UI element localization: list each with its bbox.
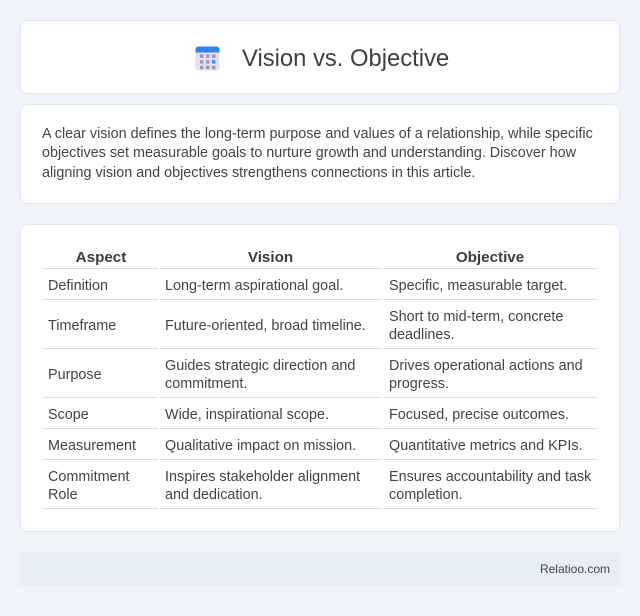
row: Purpose: Purpose bbox=[48, 367, 102, 383]
row: Measurement: Measurement bbox=[48, 438, 136, 454]
row: Scope: Focused, precise outcomes. bbox=[389, 407, 569, 423]
row: Commitment Role: and dedication. bbox=[165, 487, 263, 503]
footer bar bbox=[20, 552, 620, 586]
row: Scope: Scope bbox=[48, 407, 89, 423]
row: Commitment Role: Inspires stakeholder alignment bbox=[165, 469, 360, 485]
intro text bbox=[42, 126, 593, 181]
row: Commitment Role: completion. bbox=[389, 487, 463, 503]
row: Commitment Role: Ensures accountability and task bbox=[389, 469, 591, 485]
row: Commitment Role: Commitment bbox=[48, 469, 130, 485]
row: Scope: Wide, inspirational scope. bbox=[165, 407, 329, 423]
row: Purpose: Drives operational actions and bbox=[389, 358, 583, 374]
column header: Vision: Vision bbox=[248, 249, 293, 266]
row: Definition: Definition bbox=[48, 278, 108, 294]
row: Timeframe: deadlines. bbox=[389, 327, 455, 343]
panel: comparison table bbox=[20, 224, 620, 532]
icon: calendar bbox=[196, 46, 220, 70]
row: Definition: Long-term aspirational goal. bbox=[165, 278, 343, 294]
row: Timeframe bbox=[48, 309, 563, 343]
row: Commitment Role: Role bbox=[48, 487, 78, 503]
column header: Aspect: Aspect bbox=[76, 249, 126, 266]
row: Purpose: commitment. bbox=[165, 376, 247, 392]
title: Vision vs. Objective bbox=[242, 44, 449, 72]
panel: introduction bbox=[20, 104, 620, 204]
row: Definition bbox=[48, 278, 567, 294]
row: Purpose: progress. bbox=[389, 376, 449, 392]
row: Purpose bbox=[48, 358, 583, 392]
panel: title header bbox=[20, 20, 620, 94]
row: Purpose: Guides strategic direction and bbox=[165, 358, 355, 374]
row: Timeframe: Timeframe bbox=[48, 318, 116, 334]
row: Measurement: Qualitative impact on mission. bbox=[165, 438, 356, 454]
intro text: objectives set measurable goals to nurture growth and understanding. Discover how bbox=[42, 145, 576, 161]
footer text: site credit: Relatioo.com bbox=[540, 562, 610, 576]
row: Scope bbox=[48, 407, 569, 423]
row: Definition: Specific, measurable target. bbox=[389, 278, 567, 294]
row: Commitment Role bbox=[48, 469, 592, 503]
row: Timeframe: Short to mid-term, concrete bbox=[389, 309, 563, 325]
row: Timeframe: Future-oriented, broad timeline. bbox=[165, 318, 366, 334]
intro text: A clear vision defines the long-term purpose and values of a relationship, while specific bbox=[42, 126, 593, 142]
row: Measurement bbox=[48, 438, 583, 454]
column header: Objective: Objective bbox=[456, 249, 524, 266]
intro text: aligning vision and objectives strengthens connections in this article. bbox=[42, 165, 475, 181]
row: Measurement: Quantitative metrics and KPIs. bbox=[389, 438, 583, 454]
